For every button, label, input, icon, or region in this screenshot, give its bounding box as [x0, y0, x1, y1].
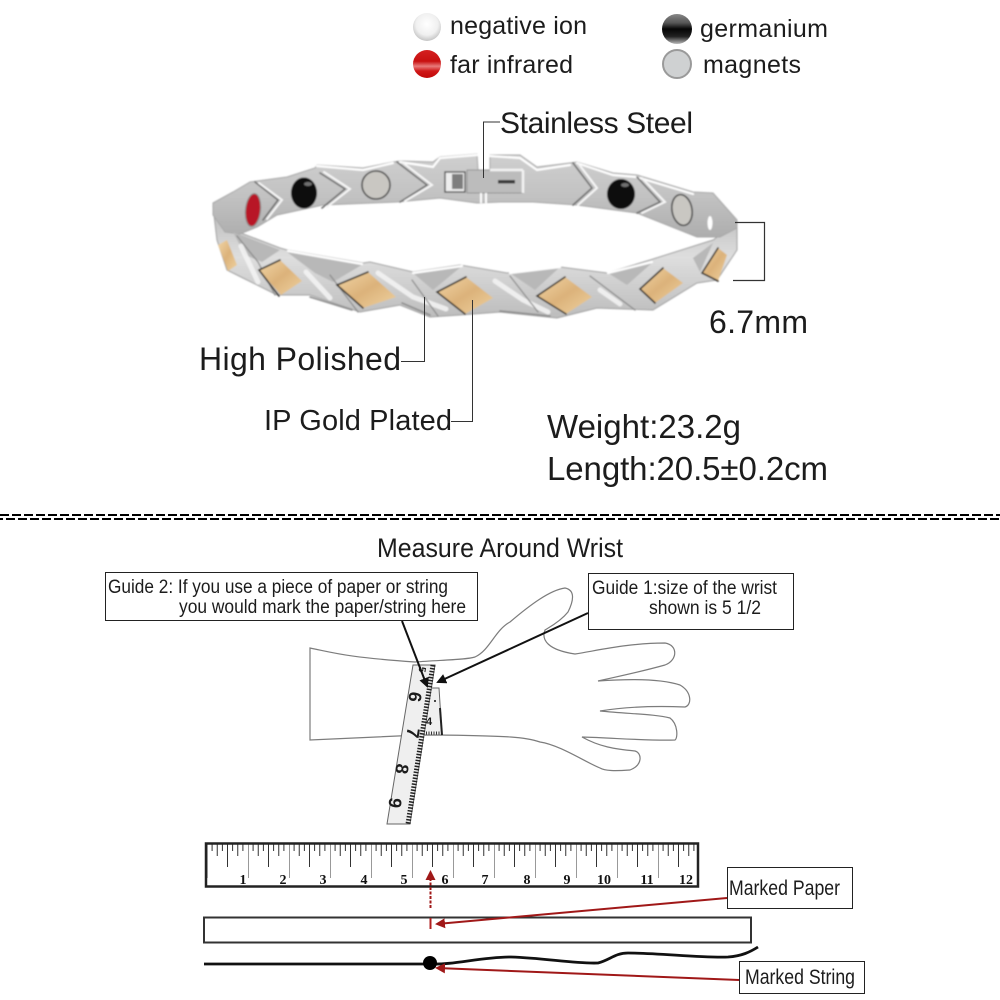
section divider	[0, 515, 1000, 519]
string	[204, 947, 758, 970]
bracelet: top strip	[213, 154, 737, 237]
short tape piece: 4	[426, 716, 433, 728]
bracelet: end hole	[708, 216, 712, 230]
callout: Guide 2	[106, 572, 478, 620]
ruler: 10	[597, 873, 611, 888]
ruler: 3	[320, 873, 326, 888]
callout: High Polished: High Polished	[199, 341, 401, 377]
label: far infrared: far infrared	[450, 51, 573, 79]
callout: Marked Paper: Marked Paper	[729, 877, 840, 900]
measuring tape: 7	[402, 726, 424, 739]
bracelet: bottom strip	[213, 207, 737, 318]
callout: Guide 1: Guide 1:size of the wrist	[592, 578, 778, 599]
bracelet: germanium stones	[291, 178, 635, 209]
legend	[413, 12, 828, 79]
icon: magnets	[663, 50, 691, 78]
callout: IP Gold Plated: IP Gold Plated	[264, 405, 452, 437]
arrow: Marked Paper	[437, 898, 727, 924]
label: germanium: germanium	[700, 15, 828, 43]
heading: Measure Around Wrist: Measure Around Wrist	[377, 533, 623, 563]
measuring tape: 6	[404, 690, 426, 703]
callout: width dimension 6.7mm: 6.7mm	[709, 304, 808, 340]
ruler: 2	[280, 873, 286, 888]
arrow: Guide 2 to tape	[402, 621, 427, 686]
callout: Stainless Steel: Stainless Steel	[500, 107, 693, 140]
callout: IP Gold Plated	[264, 300, 472, 437]
callout: width dimension 6.7mm	[709, 222, 808, 340]
callout: Marked String: Marked String	[745, 966, 855, 989]
ruler: 6	[442, 873, 448, 888]
bracelet: far infrared stone	[244, 193, 262, 227]
ruler: 1	[240, 873, 246, 888]
ruler: 5	[400, 873, 408, 888]
bracelet: stone glints	[304, 182, 629, 187]
ruler	[206, 843, 698, 888]
bracelet: grey link facets	[233, 232, 713, 290]
callout: Marked String	[740, 962, 864, 994]
weight specification: Weight:23.2g	[547, 408, 741, 445]
measuring tape: 5	[416, 666, 427, 673]
callout: Stainless Steel	[484, 107, 693, 178]
icon: far infrared	[413, 50, 441, 78]
callout: Guide 2: you would mark the paper/string here	[179, 597, 466, 618]
bracelet: diamond dark edges	[259, 248, 718, 314]
bracelet: clasp	[445, 170, 523, 203]
bracelet: magnets	[362, 171, 695, 227]
arrow: paper mark to ruler	[430, 872, 432, 908]
hand outline	[310, 588, 690, 771]
measuring tape: 8	[391, 762, 413, 775]
callout: High Polished	[199, 297, 424, 377]
length specification: Length:20.5±0.2cm	[547, 450, 828, 487]
short tape piece	[422, 688, 442, 735]
callout: Marked Paper	[728, 868, 852, 908]
callout: Guide 2: Guide 2: If you use a piece of paper or string	[108, 577, 448, 598]
callout: Guide 1	[588, 574, 794, 630]
measuring tape: 9	[384, 796, 406, 809]
paper strip	[204, 918, 751, 942]
ruler: 8	[524, 873, 530, 888]
arrow: Guide 1 to tape	[438, 613, 588, 682]
arrow: Marked String	[437, 968, 739, 980]
wrist illustration	[310, 588, 690, 824]
bracelet: gold plated diamonds	[218, 240, 727, 314]
bracelet: polished highlights	[237, 155, 693, 316]
label: magnets: magnets	[703, 51, 801, 79]
bracelet photo illustration	[213, 154, 737, 318]
ruler: 12	[679, 873, 693, 888]
ruler: 4	[360, 873, 368, 888]
ruler: 7	[482, 873, 488, 888]
ruler: 11	[640, 873, 654, 888]
icon: germanium	[662, 14, 692, 44]
measuring tape	[384, 665, 435, 824]
callout: Guide 1: shown is 5 1/2	[649, 598, 761, 619]
ruler: 9	[564, 873, 570, 888]
icon: negative ion	[413, 13, 441, 41]
label: negative ion: negative ion	[450, 12, 587, 40]
